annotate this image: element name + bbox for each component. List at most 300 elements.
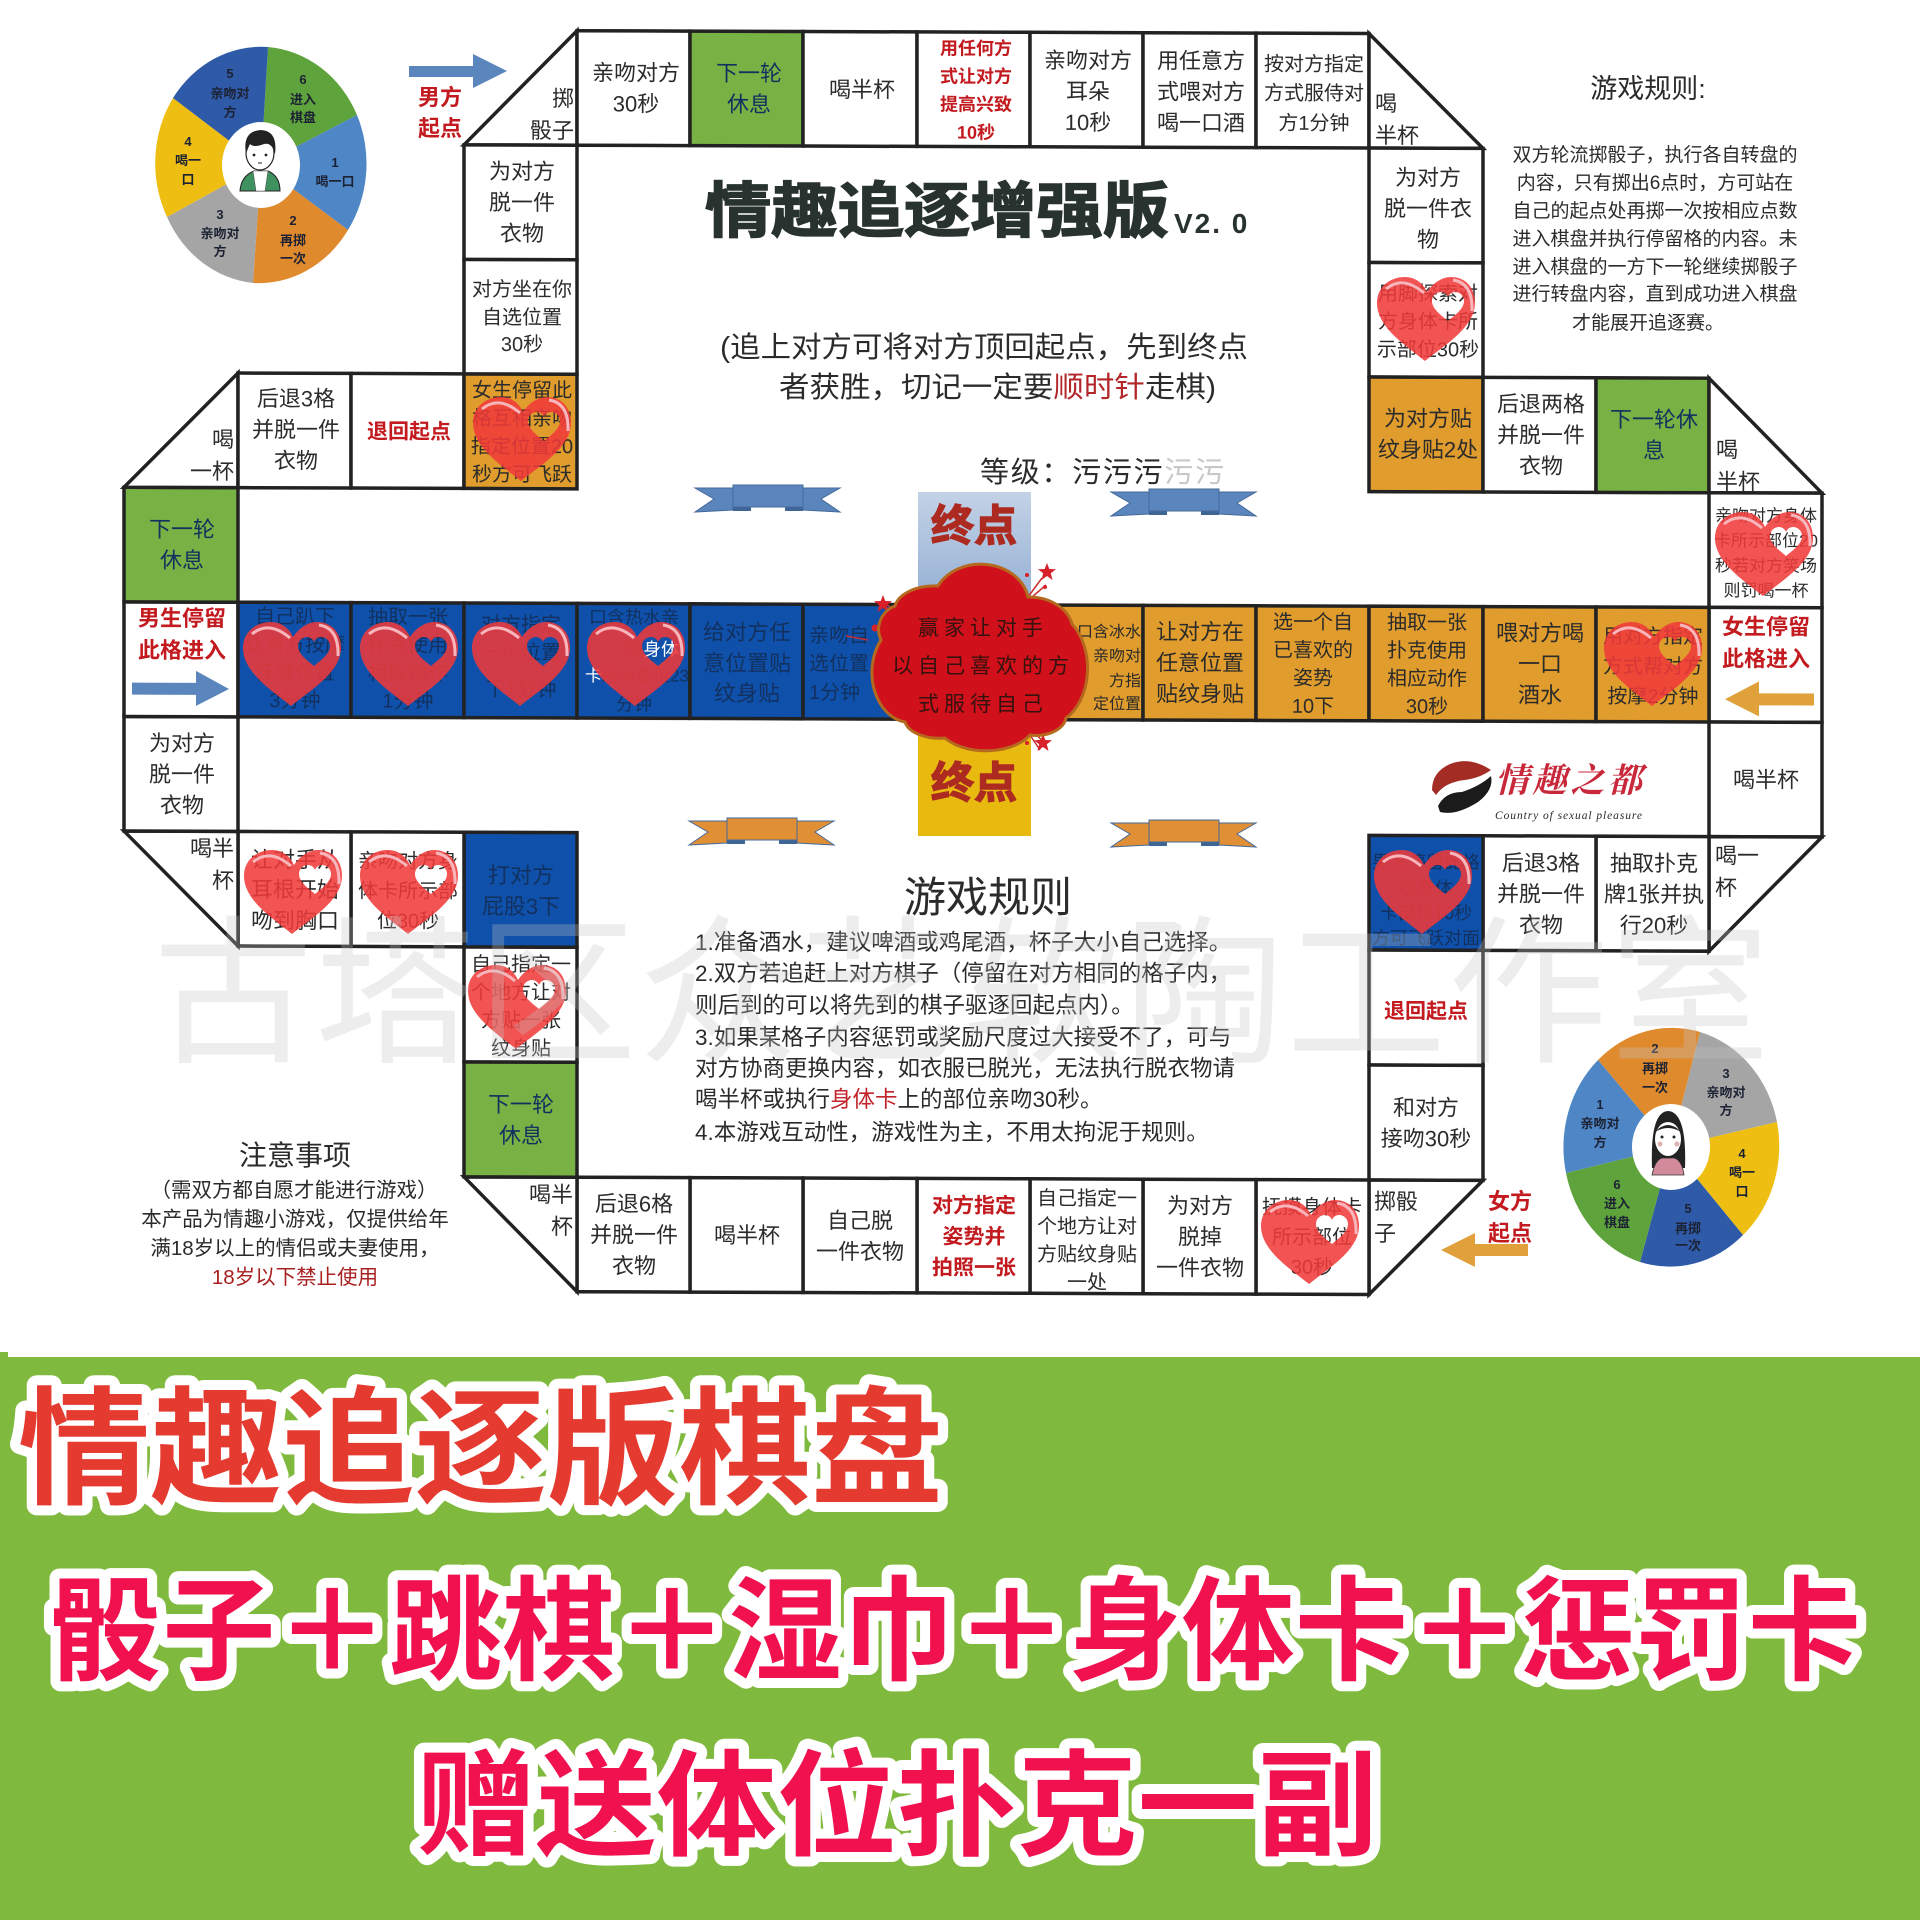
- cell: blue lane 4: 口含热水亲: [589, 607, 679, 628]
- cell: orange lane 3: [1369, 606, 1483, 721]
- cell: body card lower left: 位30秒: [377, 910, 439, 933]
- wheel: female: 口: [1735, 1184, 1749, 1199]
- notice panel: 本产品为情趣小游戏，仅提供给年: [141, 1208, 449, 1231]
- cell: orange lane 5: 让对方在: [1156, 619, 1244, 645]
- wheel: female: 方: [1719, 1103, 1733, 1118]
- cell: blue lane 1: 3分钟: [269, 689, 321, 712]
- cell: blue lane 1: [238, 602, 351, 717]
- cell: draw poker: 牌1张并执: [1604, 882, 1704, 907]
- cell: serve 1 minute: [1256, 33, 1369, 148]
- cell: half cup: [803, 32, 917, 146]
- cell: kiss 30s right: 和对方: [1393, 1095, 1459, 1120]
- cell: blue lane 5: 意位置贴: [703, 651, 791, 676]
- cell: feed drink: 式喂对方: [1157, 79, 1245, 105]
- cell: feed drink: 用任意方: [1157, 48, 1245, 74]
- cell: rest: 休息: [727, 92, 771, 117]
- winner burst cloud: 赢家让对手: [918, 617, 1048, 640]
- cell: blue lane 2: [351, 603, 464, 718]
- cell: red photo task: [917, 1178, 1030, 1293]
- cell: rest left: [124, 487, 238, 602]
- winner burst cloud: 以自己喜欢的方: [892, 655, 1074, 678]
- cell: blue lane 6: 1分钟: [809, 681, 860, 704]
- cell: back three right: 衣物: [1519, 913, 1563, 938]
- cell: half cup bottom: 喝半杯: [714, 1223, 780, 1248]
- corner cell: roll dice top-left: 骰子: [530, 118, 574, 143]
- wheel: male: 方: [213, 244, 227, 259]
- heart: [468, 965, 566, 1049]
- rules panel: top right: [1512, 74, 1798, 334]
- cell: blue lane 5: [690, 604, 803, 719]
- cell: orange girl stop: 女生停留此: [472, 379, 572, 402]
- finish block: yellow: [918, 720, 1031, 836]
- wheel: male: [155, 47, 367, 283]
- cell: blue lane 4: 所示部位23: [602, 666, 689, 686]
- corner cell: one cup left: [124, 373, 238, 488]
- cell: kiss from ear: 让对手从: [251, 847, 339, 872]
- cell: red task: 10秒: [957, 123, 995, 143]
- cell: body card lower left: 亲吻对方身: [358, 849, 458, 873]
- rules panel: centre bottom: 4.本游戏互动性，游戏性为主，不用太拘泥于规则。: [695, 1120, 1209, 1145]
- corner cell: half cup left: 杯: [212, 868, 234, 893]
- wheel: female: 进入: [1604, 1196, 1630, 1211]
- cell: tattoo sticker x2: 为对方贴: [1384, 406, 1472, 431]
- cell: blue lane 6: 亲吻自: [809, 624, 869, 647]
- cell: self clothing: 自己脱: [827, 1208, 893, 1233]
- cell: body card 30s: [1369, 262, 1483, 377]
- cell: orange lane 6: 定位置: [1093, 695, 1141, 713]
- cell: orange lane 2: 酒水: [1518, 683, 1562, 708]
- wheel: male: 亲吻对: [210, 86, 250, 101]
- cell: remove clothing left: 脱一件: [149, 762, 215, 787]
- cell: remove clothing right: [1369, 148, 1483, 263]
- rules panel: centre bottom: 1.准备酒水，建议啤酒或鸡尾酒，杯子大小自己选择。: [695, 930, 1231, 955]
- cell: body card 30s: 用脚探索对: [1378, 282, 1478, 305]
- rules panel: top right: 自己的起点处再掷一次按相应点数: [1512, 200, 1798, 222]
- subtitle: [720, 331, 1248, 404]
- rules panel: centre bottom: [695, 874, 1235, 1145]
- rules panel: top right: 进入棋盘的一方下一轮继续掷骰子: [1512, 256, 1798, 278]
- cell: body card 30s: 示部位30秒: [1377, 338, 1479, 361]
- cell: orange lane 6: 亲吻对: [1093, 647, 1141, 665]
- cell: orange lane 2: 喂对方喝: [1496, 620, 1584, 646]
- ribbon: blue right: [1111, 489, 1256, 516]
- cell: half cup: 喝半杯: [829, 77, 895, 102]
- cell: back to start right: 退回起点: [1384, 1000, 1468, 1023]
- cell: serve 1 minute: 按对方指定: [1264, 53, 1364, 76]
- cell: back three left: 并脱一件: [252, 417, 340, 442]
- wheel: male: 5: [226, 66, 234, 81]
- cell: back two: 衣物: [1519, 454, 1563, 479]
- cell: back three left: [238, 373, 351, 488]
- cell: kiss ear: 10秒: [1065, 110, 1111, 135]
- cell: orange lane 2: [1483, 607, 1596, 722]
- cell: orange lane 6: 口含冰水: [1077, 623, 1141, 641]
- cell: tattoo lower left: 自己指定一: [471, 953, 571, 976]
- cell: kiss body card right: 秒若对方笑场: [1715, 556, 1817, 576]
- heart: [1715, 512, 1813, 596]
- cell: red task: 式让对方: [940, 65, 1012, 87]
- rules panel: top right: 进行转盘内容，直到成功进入棋盘: [1512, 283, 1798, 305]
- notice panel: 满18岁以上的情侣或夫妻使用，: [150, 1237, 440, 1260]
- cell: kiss body card right: [1709, 493, 1822, 608]
- cell: remove clothing bottom: 脱掉: [1178, 1224, 1222, 1249]
- cell: tattoo lower left: 方贴一张: [481, 1009, 561, 1032]
- cell: rest left: 下一轮: [149, 517, 215, 542]
- wheel: male: 方: [223, 105, 237, 120]
- cell: remove clothing right: 物: [1417, 227, 1439, 252]
- cell: sit 30s: 30秒: [501, 333, 543, 356]
- cell: red task: 提高兴致: [940, 93, 1012, 115]
- corner cell: half cup bottom-left: 喝半: [529, 1182, 573, 1207]
- rules panel: top right: 进入棋盘并执行停留格的内容。未: [1512, 228, 1798, 250]
- cell: red task: [917, 32, 1030, 147]
- corner cell: roll dice bottom-right: 子: [1374, 1221, 1396, 1246]
- cell: orange lane 3: 30秒: [1406, 695, 1448, 718]
- cell: back three left: 衣物: [274, 448, 318, 473]
- cell: blue lane 1: 自己趴下: [255, 605, 335, 628]
- cell: body card bottom: 所示部位: [1272, 1226, 1352, 1249]
- subtitle: (追上对方可将对方顶回起点，先到终点: [720, 331, 1248, 364]
- icon: girl avatar: [1652, 1111, 1685, 1175]
- cell: orange lane 5: [1143, 605, 1256, 720]
- logo: Country of sexual pleasure: [1495, 810, 1642, 822]
- heart: [243, 622, 341, 706]
- male start label: 男方: [418, 85, 462, 110]
- wheel: female: 1: [1596, 1097, 1604, 1112]
- cell: orange lane 4: [1256, 606, 1369, 721]
- wheel: female: 一次: [1642, 1080, 1668, 1095]
- cell: orange lane 1: 按摩2分钟: [1607, 685, 1699, 708]
- cell: back six: 后退6格: [595, 1191, 673, 1217]
- wheel: female: 5: [1684, 1201, 1692, 1216]
- cell: tattoo sticker x2: 纹身贴2处: [1378, 437, 1478, 462]
- wheel: male: 4: [184, 134, 192, 149]
- logo: 情趣之都: [1495, 753, 1648, 802]
- cell: kiss ear: 耳朵: [1066, 79, 1110, 104]
- cell: boy entry: 此格进入: [138, 638, 226, 663]
- cell: kiss 30s: [577, 31, 690, 146]
- wheel: female: 一次: [1675, 1238, 1701, 1253]
- cell: remove clothing left: 为对方: [149, 731, 215, 756]
- rules panel: centre bottom: 喝半杯或执行身体卡上的部位亲吻30秒。: [695, 1087, 1103, 1112]
- cell: orange lane 4: 已喜欢的: [1273, 639, 1353, 662]
- level line: 等级：污污污污污: [980, 456, 1224, 489]
- rules panel: top right: 才能展开追逐赛。: [1572, 312, 1724, 334]
- finish block: blue: 终点: [931, 503, 1017, 551]
- wheel: female: 再掷: [1642, 1061, 1668, 1076]
- winner burst cloud: [846, 563, 1088, 751]
- wheel: female: 4: [1738, 1146, 1746, 1161]
- cell: remove clothing bottom: 为对方: [1167, 1193, 1233, 1219]
- rules panel: top right: 游戏规则:: [1590, 74, 1706, 104]
- cell: blue spank: 屁股3下: [482, 894, 560, 919]
- hearts overlay: [243, 277, 1813, 1284]
- finish block: yellow: 终点: [931, 760, 1017, 808]
- cell: blue lane 2: 扑克使用: [368, 633, 448, 657]
- cell: sit 30s: 对方坐在你: [472, 278, 572, 301]
- wheel: female: 3: [1722, 1066, 1730, 1081]
- cell: red photo task: 拍照一张: [932, 1256, 1016, 1280]
- cell: rest right: 息: [1643, 438, 1665, 463]
- cell: kiss body card right: 则罚喝一杯: [1724, 581, 1808, 601]
- watermark: 古塔区众艺软陶工作室: [153, 905, 1770, 1084]
- promo banner: [0, 1352, 1920, 1920]
- cell: remove clothing upper left: [464, 145, 577, 260]
- cell: back three right: 后退3格: [1502, 850, 1580, 876]
- wheel: male: 6: [299, 72, 307, 87]
- cell: back to start left: [351, 373, 464, 488]
- cell: blue lane 3: 下1分钟: [485, 678, 557, 701]
- wheel: female: 亲吻对: [1706, 1085, 1746, 1100]
- cell: sit 30s: 自选位置: [482, 306, 562, 329]
- cell: orange lane 3: 抽取一张: [1387, 611, 1467, 634]
- cell: body card lower left: [351, 832, 464, 947]
- subtitle: 者获胜，切记一定要 顺时针走棋): [779, 371, 1216, 404]
- logo: [1432, 753, 1648, 822]
- cell: red task: 用任何方: [940, 37, 1012, 59]
- cell: draw poker: 抽取扑克: [1610, 851, 1698, 876]
- cell: remove clothing upper left: 脱一件: [489, 190, 555, 215]
- cell: tattoo sticker x2: [1369, 377, 1483, 492]
- heart: [472, 622, 570, 706]
- corner cell: roll dice bottom-right: [1369, 1180, 1483, 1295]
- corner cell: half cup top-right: [1369, 33, 1483, 148]
- cell: blue lane 4: 吻: [625, 639, 643, 659]
- female start label: 女方: [1488, 1189, 1532, 1214]
- wheel: female: 方: [1593, 1135, 1607, 1150]
- corner cell: half cup right: [1709, 378, 1822, 495]
- wheel: female: [1563, 1028, 1779, 1267]
- cell: rest: 下一轮: [716, 61, 782, 86]
- cell: blue lane 1: 任意位置: [255, 661, 335, 684]
- cell: serve 1 minute: 方1分钟: [1278, 112, 1350, 135]
- cell: remove clothing bottom: [1143, 1179, 1256, 1294]
- ribbon: orange right: [1111, 820, 1256, 847]
- cell: back to start left: 退回起点: [367, 420, 451, 444]
- cell: red photo task: 姿势并: [943, 1225, 1005, 1249]
- promo line 1: 情趣追逐版棋盘: [18, 1379, 943, 1522]
- female start arrow: [1441, 1233, 1528, 1267]
- corner cell: roll dice top-left: [464, 30, 577, 145]
- cell: back two: [1483, 377, 1596, 492]
- cell: tattoo lower left: [464, 947, 577, 1062]
- notice panel: 注意事项: [239, 1140, 351, 1171]
- cell: feed drink: [1143, 33, 1256, 148]
- rules panel: centre bottom: 游戏规则: [904, 874, 1072, 921]
- cell: sit 30s: [464, 259, 577, 374]
- corner cell: one cup: [1709, 837, 1822, 952]
- wheel: male: 喝一: [175, 153, 201, 168]
- wheel: male: 亲吻对: [200, 226, 240, 241]
- cell: orange lane 3: 扑克使用: [1387, 639, 1467, 662]
- cell: remove clothing left: 衣物: [160, 793, 204, 818]
- corner cell: one cup left: 喝: [212, 427, 234, 452]
- cell: back three left: 后退3格: [257, 386, 335, 411]
- heart: [244, 850, 342, 934]
- cell: feed drink: 喝一口酒: [1157, 110, 1245, 136]
- cell: blue lane 5: 给对方任: [703, 620, 791, 645]
- wheel: female: 再掷: [1675, 1221, 1701, 1236]
- cell: rest lower left: 休息: [499, 1123, 543, 1148]
- cell: orange girl stop: 秒方可飞跃: [472, 463, 572, 486]
- cell: tattoo choice: 自己指定一: [1037, 1187, 1137, 1210]
- cell: blue lane 4: 卡: [585, 666, 602, 685]
- cell: remove clothing upper left: 为对方: [489, 159, 555, 184]
- game board: [124, 29, 1822, 1297]
- cell: tattoo choice: 一处: [1067, 1271, 1107, 1294]
- corner cell: half cup left: [124, 831, 238, 946]
- title: 情趣追逐增强版: [705, 178, 1169, 245]
- corner cell: one cup: 杯: [1715, 875, 1737, 900]
- wheel: female: 喝一: [1729, 1165, 1755, 1180]
- male start label: 起点: [418, 116, 462, 141]
- cell: orange lane 1: [1596, 607, 1709, 722]
- cell: rest lower left: [464, 1062, 577, 1177]
- rules panel: centre bottom: 3.如果某格子内容惩罚或奖励尺度过大接受不了，可与: [695, 1025, 1231, 1050]
- cell: remove clothing right: 为对方: [1395, 165, 1461, 190]
- cell: kiss ear: 亲吻对方: [1044, 48, 1132, 73]
- ribbon: orange left: [689, 818, 834, 845]
- cell: tattoo lower left: 个地方让对: [471, 981, 571, 1004]
- cell: tattoo choice: 方贴纹身贴: [1037, 1243, 1137, 1266]
- cell: orange lane 4: 姿势: [1293, 667, 1333, 690]
- cell: orange lane 6: [1030, 605, 1143, 720]
- cell: back six: 并脱一件: [590, 1222, 678, 1248]
- corner cell: one cup left: 一杯: [190, 459, 234, 484]
- cell: draw poker: [1596, 836, 1709, 951]
- cell: red photo task: 对方指定: [932, 1193, 1016, 1218]
- wheel: female: 2: [1651, 1041, 1659, 1056]
- cell: rest right: 下一轮休: [1610, 407, 1698, 432]
- cell: back two: 后退两格: [1497, 391, 1585, 417]
- cell: kiss 30s right: 接吻30秒: [1381, 1126, 1471, 1151]
- notice panel: （需双方都自愿才能进行游戏）: [150, 1179, 438, 1202]
- male start arrow: [409, 54, 507, 88]
- cell: kiss ear: [1030, 32, 1143, 147]
- cell: blue lane 3: 对方指定: [481, 613, 561, 636]
- heart: [360, 850, 458, 934]
- cell: self clothing: 一件衣物: [816, 1239, 904, 1264]
- rules panel: centre bottom: 对方协商更换内容，如衣服已脱光，无法执行脱衣物请: [695, 1056, 1235, 1081]
- cell: remove clothing bottom: 一件衣物: [1156, 1255, 1244, 1281]
- cell: remove clothing right: 脱一件衣: [1384, 196, 1472, 221]
- corner cell: half cup right: 半杯: [1716, 469, 1760, 494]
- cell: back six: 衣物: [612, 1253, 656, 1278]
- cell: blue lane 4: 身体: [643, 639, 679, 660]
- cell: blue lane 6: [803, 604, 917, 719]
- notice panel: [141, 1140, 449, 1289]
- cell: orange lane 3: 相应动作: [1387, 667, 1467, 690]
- heart: [587, 622, 685, 706]
- cell: girl entry: 此格进入: [1722, 646, 1810, 672]
- cell: rest lower left: 下一轮: [488, 1092, 554, 1117]
- cell: half cup right lower: 喝半杯: [1733, 767, 1799, 792]
- cell: kiss 30s: 亲吻对方: [592, 60, 680, 86]
- cell: back three right: 并脱一件: [1497, 881, 1585, 907]
- cell: orange lane 6: 方指: [1109, 672, 1141, 690]
- heart: [473, 397, 571, 481]
- cell: body card 30s: 方身体卡所: [1378, 310, 1478, 333]
- cell: kiss 30s right: [1369, 1065, 1483, 1180]
- cell: orange lane 5: 任意位置: [1156, 650, 1244, 676]
- cell: kiss from ear: 耳根开始: [251, 877, 339, 902]
- cell: kiss body card right: 卡所示部位20: [1714, 531, 1818, 551]
- cell: body card bottom: 30秒: [1291, 1256, 1333, 1279]
- cell: kiss 30s: 30秒: [613, 91, 659, 117]
- cell: orange girl stop: [464, 374, 577, 489]
- cell: orange lane 4: 10下: [1292, 696, 1334, 718]
- corner cell: roll dice bottom-right: 掷骰: [1374, 1189, 1418, 1214]
- rules panel: top right: 内容，只有掷出6点时，方可站在: [1517, 172, 1793, 194]
- cell: blue body card right: 咬身体: [1399, 878, 1453, 898]
- cell: blue body card right: 卡部位10秒: [1380, 903, 1472, 923]
- wheel: male: 口: [181, 172, 195, 187]
- wheel: female: 6: [1613, 1177, 1621, 1192]
- cell: rest: [690, 31, 803, 146]
- female start label: 起点: [1488, 1221, 1532, 1246]
- cell: kiss from ear: 吻到胸口: [251, 908, 339, 933]
- corner cell: one cup: 喝一: [1715, 843, 1759, 868]
- wheel: female: 棋盘: [1604, 1215, 1630, 1230]
- wheel: male: 2: [289, 213, 297, 228]
- title: V2. 0: [1174, 208, 1249, 239]
- heart: [1377, 277, 1475, 361]
- cell: back two: 并脱一件: [1497, 422, 1585, 448]
- rules panel: top right: 双方轮流掷骰子，执行各自转盘的: [1512, 144, 1798, 166]
- icon: boy avatar: [240, 130, 280, 191]
- wheel: male: 一次: [280, 251, 306, 266]
- cell: kiss body card right: 亲吻对方身体: [1715, 506, 1817, 526]
- cell: blue spank: 打对方: [488, 863, 554, 888]
- cell: girl entry: 女生停留: [1722, 614, 1810, 640]
- cell: kiss from ear: [238, 831, 351, 946]
- cell: blue lane 2: 相应动作: [368, 661, 448, 685]
- cell: orange lane 1: 方式帮对方: [1603, 655, 1703, 678]
- cell: blue lane 2: 1分钟: [382, 690, 434, 713]
- heart: [1374, 850, 1472, 934]
- corner cell: half cup bottom-left: [464, 1177, 577, 1292]
- cell: blue body card right: 方可飞跃对面: [1372, 928, 1480, 948]
- rules panel: centre bottom: 2.双方若追赶上对方棋子（停留在对方相同的格子内，: [695, 961, 1231, 986]
- cell: body card bottom: [1256, 1180, 1369, 1294]
- cell: blue body card right: 男方停留此格: [1372, 852, 1480, 872]
- cell: blue lane 4: 分钟: [616, 694, 652, 714]
- wheel: male: 喝一口: [315, 174, 355, 189]
- cell: remove clothing upper left: 衣物: [500, 221, 544, 246]
- corner cell: roll dice top-left: 掷: [552, 86, 574, 111]
- cell: half cup bottom: [690, 1178, 803, 1293]
- cell: blue spank: [464, 832, 577, 947]
- wheel: male: 1: [331, 155, 339, 170]
- cell: orange lane 5: 贴纹身贴: [1156, 681, 1244, 707]
- wheel: male: 3: [216, 207, 224, 222]
- cell: back to start right: [1369, 950, 1483, 1065]
- cell: boy entry: [124, 602, 238, 717]
- winner burst cloud: 式服待自己: [918, 693, 1048, 716]
- cell: blue lane 5: 纹身贴: [714, 681, 780, 706]
- wheel: male: 棋盘: [290, 110, 316, 125]
- promo line 2: 骰子＋跳棋＋湿巾＋身体卡＋惩罚卡: [49, 1569, 1861, 1695]
- heart: [1604, 622, 1702, 706]
- ribbon: blue left: [695, 485, 840, 512]
- corner cell: half cup top-right: 半杯: [1375, 123, 1419, 148]
- cell: tattoo choice: 个地方让对: [1037, 1215, 1137, 1238]
- cell: orange lane 1: 用对方指定: [1603, 625, 1703, 648]
- cell: blue lane 3: 一个位置: [481, 641, 561, 664]
- cell: orange girl stop: 指定位置20: [471, 435, 573, 458]
- notice panel: 18岁以下禁止使用: [212, 1266, 378, 1289]
- cell: orange lane 2: 一口: [1518, 652, 1562, 677]
